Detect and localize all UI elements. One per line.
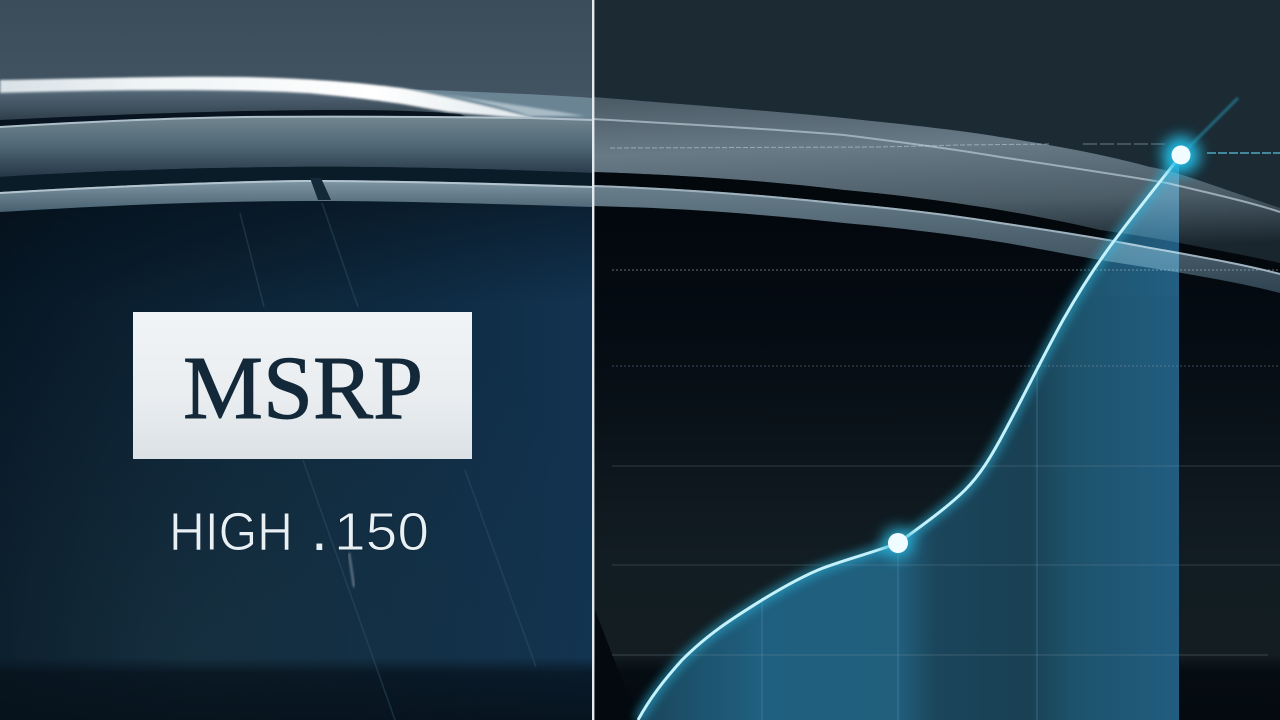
right trim highlight [593, 186, 1280, 274]
left window glass [212, 171, 592, 697]
price curve line [638, 155, 1181, 720]
roof top edge [0, 117, 593, 127]
card background [133, 312, 472, 459]
dark trim line [0, 110, 466, 126]
vertical divider [592, 0, 594, 720]
shaded area under curve [638, 158, 1179, 720]
chart gridlines [610, 144, 1280, 655]
peak data point with flare [1162, 98, 1238, 174]
MSRP heading: MSRP [183, 339, 423, 438]
high value label: . [311, 496, 328, 563]
MSRP label card [133, 312, 472, 459]
high value label: HIGH [169, 502, 293, 562]
trim strip highlight [0, 181, 593, 193]
right panel: chart over car roof [593, 0, 1280, 720]
right cabin background [593, 190, 1280, 720]
right window trim strip [593, 185, 1280, 293]
left sky background [0, 0, 592, 117]
high value label: 150 [334, 502, 429, 562]
door pillar cut [310, 178, 331, 200]
light streak below the numeral [349, 553, 354, 587]
right dark gutter [593, 172, 1280, 278]
faint pane reflections [240, 203, 536, 720]
mid data point [882, 527, 914, 559]
curve glow [638, 155, 1181, 720]
window glass lighter lower area [0, 459, 344, 668]
dark base under shaded area [688, 411, 1179, 666]
left panel: car roof close-up [0, 0, 593, 720]
right roof highlight line [593, 119, 1280, 212]
dark gutter [44, 166, 592, 186]
area vertical grid lines [762, 365, 1037, 720]
pale wisp behind highlight [408, 89, 593, 120]
secondary pale streak [446, 94, 582, 117]
main roof panel [0, 117, 593, 177]
right sky background [594, 0, 1280, 230]
lower-left dark wedge [595, 610, 617, 668]
window glass shading [0, 200, 593, 720]
white roof highlight [0, 77, 535, 118]
window trim strip [0, 180, 593, 212]
right roof panel [594, 97, 1280, 236]
upper trim [0, 90, 439, 120]
